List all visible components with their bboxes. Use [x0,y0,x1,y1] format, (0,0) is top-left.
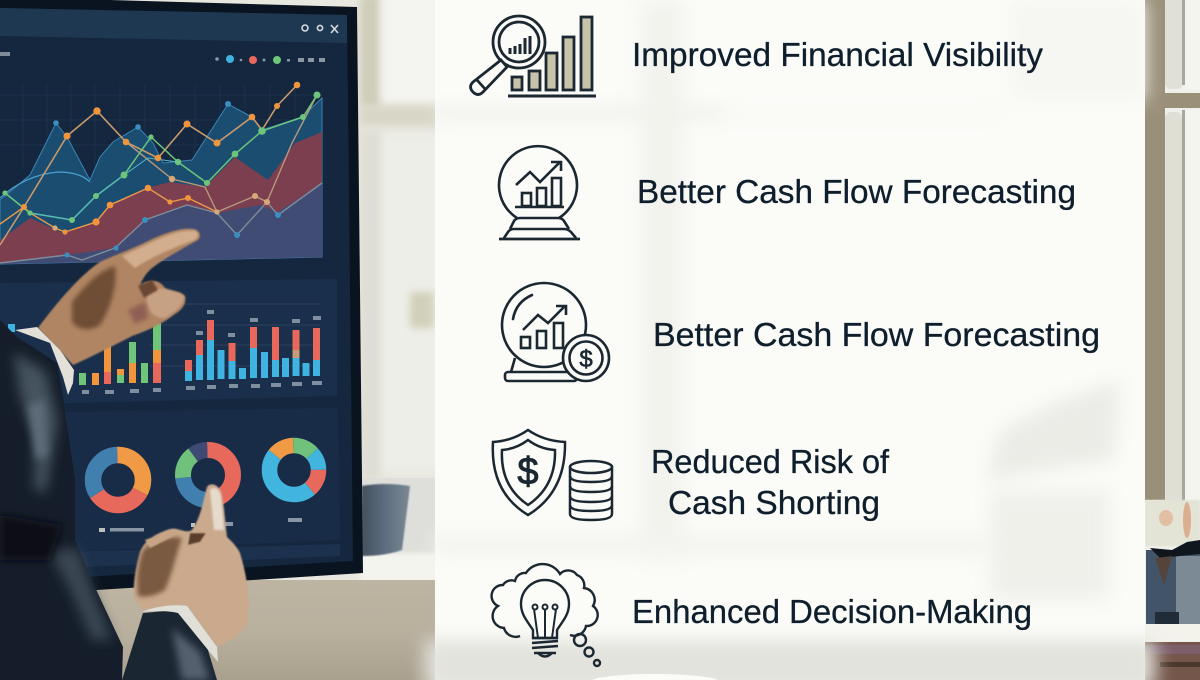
icon: shield with dollar and coin stack [493,430,612,520]
label: reduced risk of cash shorting: Cash Shorting [668,484,880,521]
label: reduced risk of cash shorting [651,443,890,521]
label: better cash flow forecasting second: Better Cash Flow Forecasting [653,316,1100,353]
potted plant [1146,540,1200,624]
donut chart 2 [183,450,233,500]
lower suit sleeve with cuff [122,605,218,680]
icon: crystal ball with dollar coin [502,283,609,381]
icon: shield with dollar and coin stack: $ [517,451,539,493]
area line chart [0,82,322,264]
suit sleeve and shoulder [0,320,123,680]
monitor bezel [0,0,363,600]
bar chart panel [0,279,337,405]
label: improved financial visibility: Improved Financial Visibility [632,36,1043,73]
label: reduced risk of cash shorting: Reduced Risk of [651,443,890,480]
pointing hand lower [134,484,249,647]
translucent text panel [425,0,1155,680]
dashboard screen [0,8,353,582]
label: better cash flow forecasting: Better Cash Flow Forecasting [637,173,1076,210]
icon: light bulb in thought cloud [492,564,600,666]
white shirt cuff [15,327,74,395]
donut panel [60,408,340,568]
legend dots [215,55,325,64]
donut chart 1 [93,455,143,505]
icon: crystal ball with dollar coin: $ [579,346,593,373]
donut chart 3 [270,446,318,494]
background object: mug on desk [362,484,410,556]
pointing hand upper [38,229,200,365]
icon: crystal ball with rising chart [499,146,580,239]
right edge: window frame and plant [1145,0,1200,680]
window title bar [0,8,347,43]
window controls [302,25,338,33]
label: enhanced decision-making: Enhanced Decision-Making [632,593,1032,630]
icon: magnifying glass over bar chart [470,16,596,96]
